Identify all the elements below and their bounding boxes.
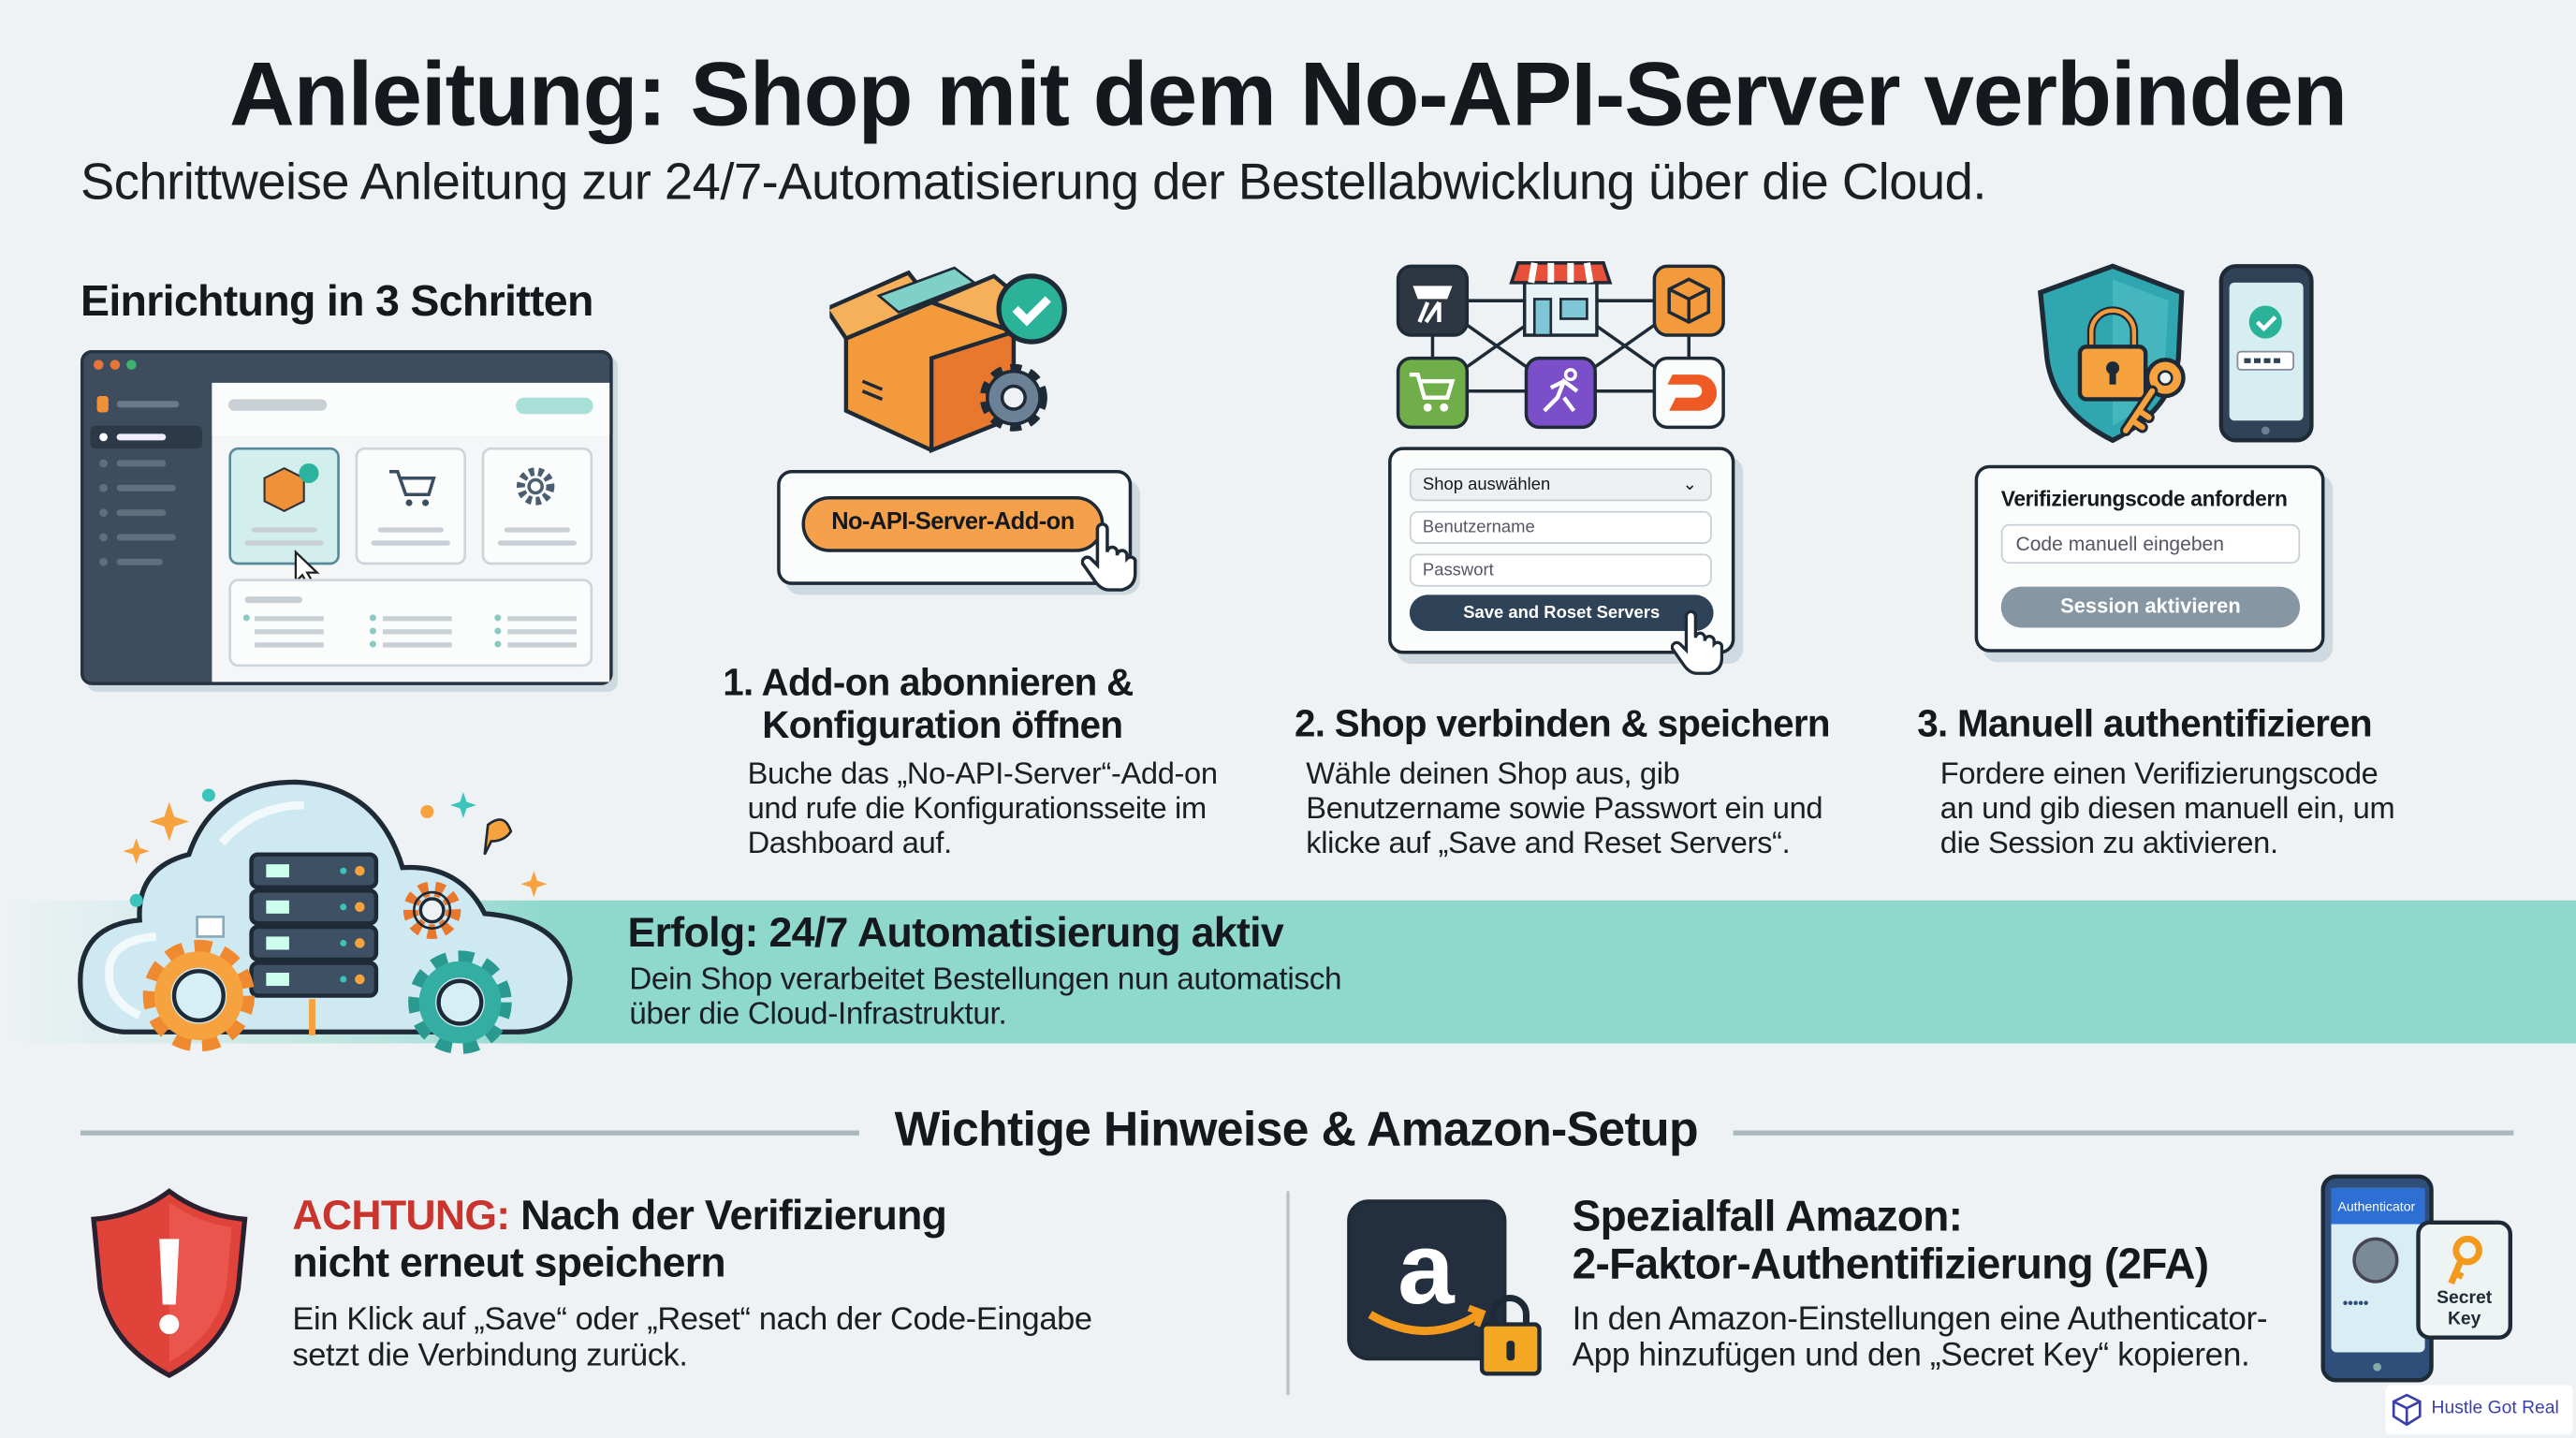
input: username: Benutzername [1423,518,1535,537]
section heading: setup: Einrichtung in 3 Schritten [80,276,593,326]
step 2 text: Benutzername sowie Passwort ein und [1306,790,1822,825]
warning heading [292,1193,946,1286]
section heading: notes: Wichtige Hinweise & Amazon-Setup [895,1103,1698,1157]
input: code [2001,524,2300,564]
success banner [0,901,2576,1043]
step 1 text [748,756,1218,859]
icon: warning shield [91,1188,247,1378]
watermark: Hustle Got Real [2432,1399,2559,1418]
button: save and reset: Save and Roset Servers [1463,603,1660,623]
warning text [292,1301,1092,1373]
input: code: Code manuell eingeben [2016,533,2224,555]
icon: hand cursor [1670,610,1724,675]
select: shop: ⌄ [1683,475,1697,494]
step 1 heading: 1. Add-on abonnieren & [723,661,1134,703]
watermark [2385,1386,2572,1434]
icon: amazon with lock [1347,1199,1542,1376]
step 1 text: Buche das „No-API-Server“-Add-on [748,756,1218,790]
amazon text [1573,1301,2267,1373]
button: No-API-Server-Add-on [801,496,1104,552]
step 1 heading [723,661,1134,746]
banner heading: Erfolg: 24/7 Automatisierung aktiv [627,910,1283,956]
input: password [1410,553,1712,587]
step 3 text: Fordere einen Verifizierungscode [1940,756,2378,790]
step 3 text [1940,756,2394,859]
icon: authenticator phone with secret key: Authenticator [2338,1199,2416,1214]
icon: authenticator phone with secret key: Key [2448,1310,2481,1329]
label: request code: Verifizierungscode anfordern [2001,487,2288,511]
step 3 text: die Session zu aktivieren. [1940,825,2278,859]
icon: authenticator phone with secret key: ••••• [2343,1296,2369,1312]
step 2 text [1306,756,1822,859]
icon: package with check and gear [829,266,1067,453]
banner text [629,962,1341,1032]
step 3 text: an und gib diesen manuell ein, um [1940,790,2394,825]
button: No-API-Server-Add-on: No-API-Server-Add-on [831,509,1075,536]
title: Anleitung: Shop mit dem No-API-Server verbinden [229,43,2347,144]
step 2 heading: 2. Shop verbinden & speichern [1295,701,1830,744]
button: activate session: Session aktivieren [2060,594,2241,618]
button: save and reset [1410,594,1714,631]
input: password: Passwort [1423,560,1494,580]
icon: cloud servers gears [78,779,573,1054]
icon: hand pointer [1080,522,1136,592]
icon: authenticator phone with secret key: Secret [2437,1288,2493,1308]
subtitle: Schrittweise Anleitung zur 24/7-Automatisierung der Bestellabwicklung über die Cloud. [80,153,1986,211]
amazon text: App hinzufügen und den „Secret Key“ kopieren. [1573,1338,2249,1373]
section heading: notes [80,1103,2514,1157]
step 3 heading: 3. Manuell authentifizieren [1917,701,2372,744]
icon: shield lock key and phone [2038,264,2314,444]
banner text: Dein Shop verarbeitet Bestellungen nun automatisch [629,962,1341,997]
amazon heading: 2-Faktor-Authentifizierung (2FA) [1573,1239,2208,1288]
warning heading: ACHTUNG: Nach der Verifizierung [292,1193,946,1239]
select: shop: Shop auswählen [1423,475,1550,494]
input: username [1410,511,1712,544]
dashboard mockup [80,350,618,692]
banner text: über die Cloud-Infrastruktur. [629,997,1006,1032]
step 2 text: klicke auf „Save and Reset Servers“. [1306,825,1790,859]
step 2 text: Wähle deinen Shop aus, gib [1306,756,1679,790]
button card: addon [777,470,1132,585]
icon: shop network [1397,261,1725,429]
warning text: Ein Klick auf „Save“ oder „Reset“ nach der Code-Eingabe [292,1301,1092,1338]
step 1 heading: Konfiguration öffnen [762,703,1122,746]
amazon heading: Spezialfall Amazon: [1573,1191,1962,1240]
form card: shop login [1388,447,1734,654]
icon: authenticator phone with secret key [2321,1174,2512,1382]
button: activate session [2001,587,2300,627]
warning heading: nicht erneut speichern [292,1240,725,1286]
amazon heading [1573,1191,2208,1288]
select: shop [1410,468,1712,501]
amazon text: In den Amazon-Einstellungen eine Authenticator- [1573,1301,2267,1338]
step 1 text: und rufe die Konfigurationsseite im [748,790,1207,825]
step 1 text: Dashboard auf. [748,825,952,859]
icon: amazon with lock: a [1398,1211,1456,1326]
verification card [1975,465,2324,653]
warning text: setzt die Verbindung zurück. [292,1338,688,1373]
vertical divider [1286,1191,1290,1395]
